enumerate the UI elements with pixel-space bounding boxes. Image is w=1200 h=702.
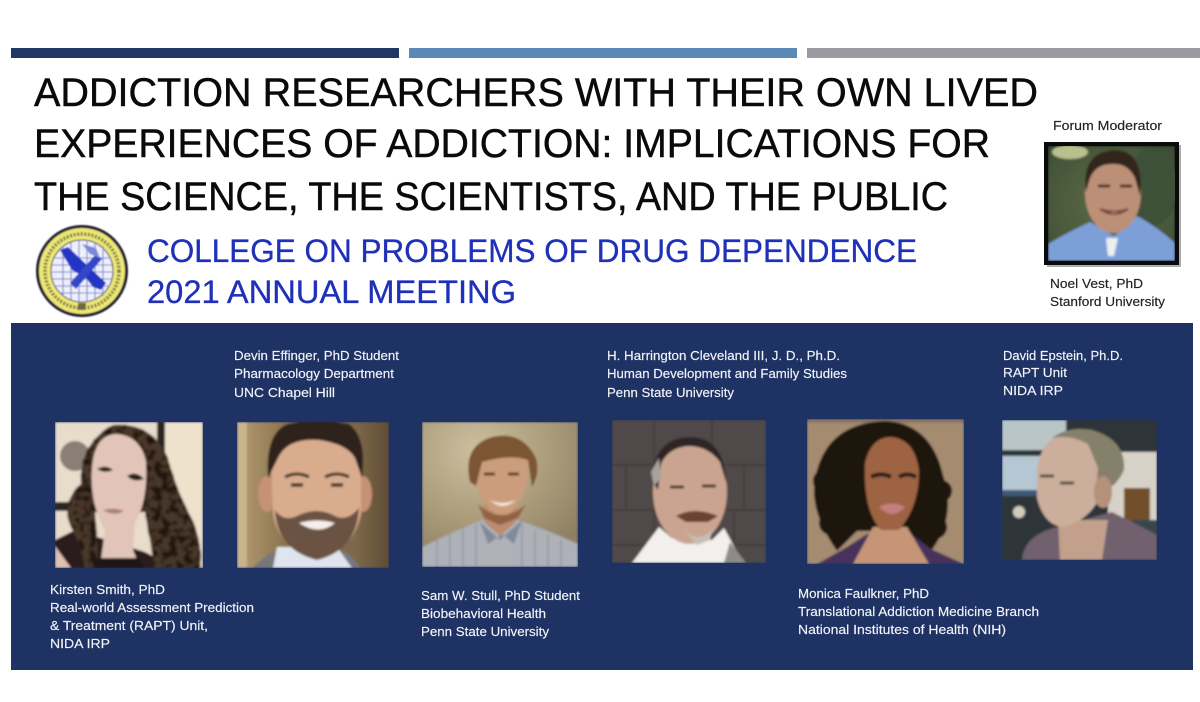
title: ADDICTION RESEARCHERS WITH THEIR OWN LIVED xyxy=(34,71,1038,115)
speaker caption: David Epstein: David Epstein, Ph.D. xyxy=(1003,349,1123,363)
icon: CPDD seal logo xyxy=(36,225,128,317)
speaker caption: Kirsten Smith xyxy=(50,583,254,651)
moderator caption: Noel Vest, PhD xyxy=(1050,277,1143,291)
title xyxy=(34,71,1038,219)
speaker caption: H. Harrington Cleveland III: Human Development and Family Studies xyxy=(607,367,847,381)
moderator caption: Stanford University xyxy=(1050,295,1166,309)
photo: Devin Effinger xyxy=(237,422,389,568)
speaker caption: Monica Faulkner: National Institutes of Health (NIH) xyxy=(798,623,1006,637)
speaker caption: Sam W. Stull: Biobehavioral Health xyxy=(421,607,546,621)
subtitle xyxy=(147,233,917,310)
panel: speakers xyxy=(11,323,1193,670)
speaker caption: Devin Effinger: UNC Chapel Hill xyxy=(234,386,335,400)
title: EXPERIENCES OF ADDICTION: IMPLICATIONS FOR xyxy=(34,122,990,166)
speaker caption: Kirsten Smith: NIDA IRP xyxy=(50,637,110,651)
photo: David Epstein xyxy=(1002,420,1157,560)
speaker caption: Kirsten Smith: & Treatment (RAPT) Unit, xyxy=(50,619,208,633)
speaker caption: Sam W. Stull: Sam W. Stull, PhD Student xyxy=(421,589,581,603)
forum moderator label: Forum Moderator xyxy=(1053,119,1162,133)
speaker caption: Monica Faulkner xyxy=(798,587,1039,637)
subtitle: COLLEGE ON PROBLEMS OF DRUG DEPENDENCE xyxy=(147,233,917,269)
speaker caption: Devin Effinger: Pharmacology Department xyxy=(234,367,395,381)
speaker caption: Sam W. Stull: Penn State University xyxy=(421,625,550,639)
speaker caption: H. Harrington Cleveland III: H. Harrington Cleveland III, J. D., Ph.D. xyxy=(607,349,840,363)
speaker caption: David Epstein: RAPT Unit xyxy=(1003,366,1068,380)
speaker caption: H. Harrington Cleveland III xyxy=(607,349,847,400)
photo: Noel Vest xyxy=(1044,142,1181,267)
speaker caption: Devin Effinger xyxy=(234,349,400,400)
speaker caption: Monica Faulkner: Translational Addiction Medicine Branch xyxy=(798,605,1039,619)
speaker caption: Kirsten Smith: Real-world Assessment Prediction xyxy=(50,601,254,615)
subtitle: 2021 ANNUAL MEETING xyxy=(147,274,516,310)
speaker caption: H. Harrington Cleveland III: Penn State University xyxy=(607,386,735,400)
speaker caption: David Epstein: NIDA IRP xyxy=(1003,384,1063,398)
moderator caption xyxy=(1050,277,1166,309)
speaker caption: Sam W. Stull xyxy=(421,589,581,639)
speaker caption: Monica Faulkner: Monica Faulkner, PhD xyxy=(798,587,929,601)
decorative top bars xyxy=(11,48,1200,58)
photo: Kirsten Smith xyxy=(55,422,203,568)
speaker caption: Devin Effinger: Devin Effinger, PhD Student xyxy=(234,349,400,363)
photo: H. Harrington Cleveland III xyxy=(612,420,766,563)
title: THE SCIENCE, THE SCIENTISTS, AND THE PUBLIC xyxy=(34,175,948,219)
photo: Sam W. Stull xyxy=(422,422,578,567)
speaker caption: David Epstein xyxy=(1003,349,1123,398)
photo: Monica Faulkner xyxy=(807,419,964,564)
speaker caption: Kirsten Smith: Kirsten Smith, PhD xyxy=(50,583,165,597)
